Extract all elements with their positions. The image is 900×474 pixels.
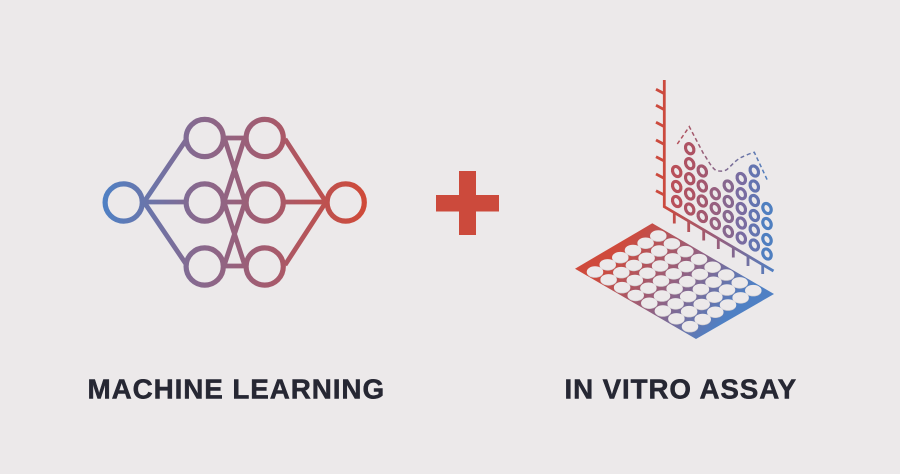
hidden layer one nodes — [186, 119, 223, 285]
in vitro assay illustration — [575, 80, 774, 339]
hidden layer two nodes — [246, 119, 283, 285]
chart axes with tick marks — [656, 80, 774, 274]
label: machine learning: MACHINE LEARNING — [88, 374, 385, 404]
neural network diagram — [105, 119, 364, 285]
dashed response curve — [677, 127, 767, 180]
plus sign — [436, 171, 499, 235]
well plate — [575, 223, 774, 339]
input node — [105, 184, 142, 221]
well response rings — [671, 142, 773, 260]
plate body — [575, 223, 774, 339]
output node — [327, 184, 364, 221]
plate wells — [587, 230, 762, 332]
label: in vitro assay: IN VITRO ASSAY — [564, 374, 797, 404]
connections between network layers — [144, 137, 326, 266]
